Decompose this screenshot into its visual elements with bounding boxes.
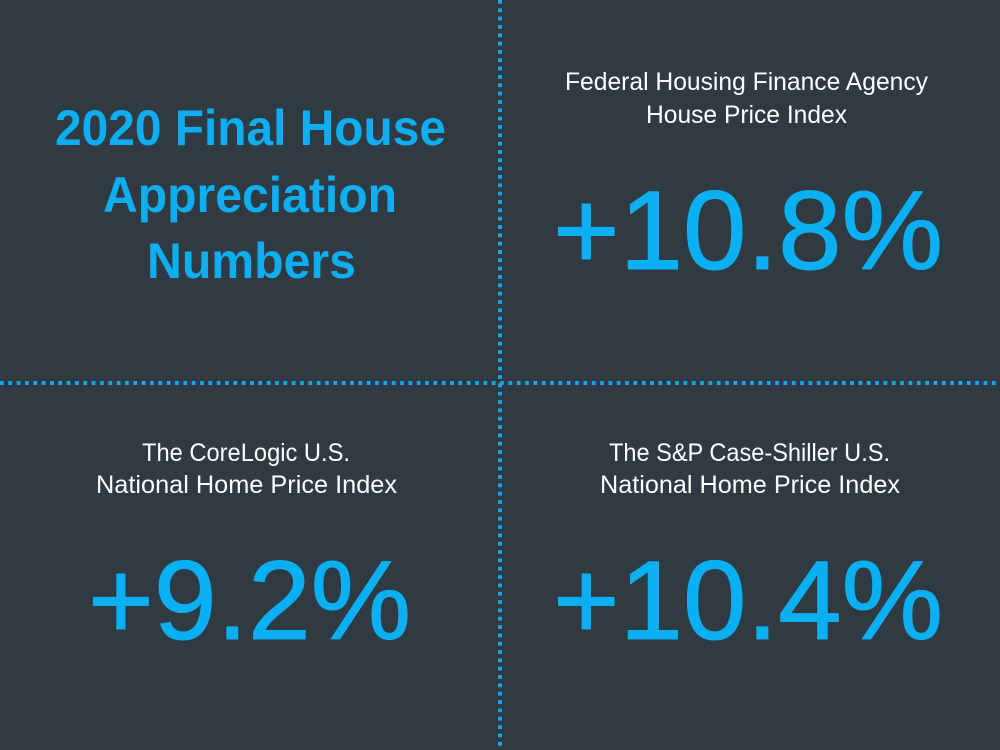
panel: S&P Case-Shiller bbox=[553, 439, 943, 663]
label: Case-Shiller index: The S&P Case-Shiller U.S. bbox=[609, 439, 890, 467]
label: CoreLogic index: National Home Price Index bbox=[96, 471, 397, 499]
label: FHFA index: House Price Index bbox=[646, 101, 847, 129]
value: +10.8%: +10.8% bbox=[553, 168, 943, 293]
label: FHFA index: Federal Housing Finance Agency bbox=[565, 68, 928, 96]
value: +10.4%: +10.4% bbox=[553, 538, 943, 663]
label: CoreLogic index: The CoreLogic U.S. bbox=[142, 439, 350, 467]
title: Numbers bbox=[147, 233, 356, 289]
title bbox=[55, 100, 446, 289]
label: Case-Shiller index: National Home Price Index bbox=[600, 471, 900, 499]
title: 2020 Final House bbox=[55, 100, 446, 156]
panel: CoreLogic bbox=[88, 439, 411, 663]
title: Appreciation bbox=[103, 167, 397, 223]
value: +9.2%: +9.2% bbox=[88, 538, 411, 663]
label: FHFA index bbox=[565, 68, 928, 129]
label: Case-Shiller index bbox=[600, 439, 900, 499]
panel: Federal Housing Finance Agency bbox=[553, 68, 943, 293]
label: CoreLogic index bbox=[96, 439, 397, 499]
